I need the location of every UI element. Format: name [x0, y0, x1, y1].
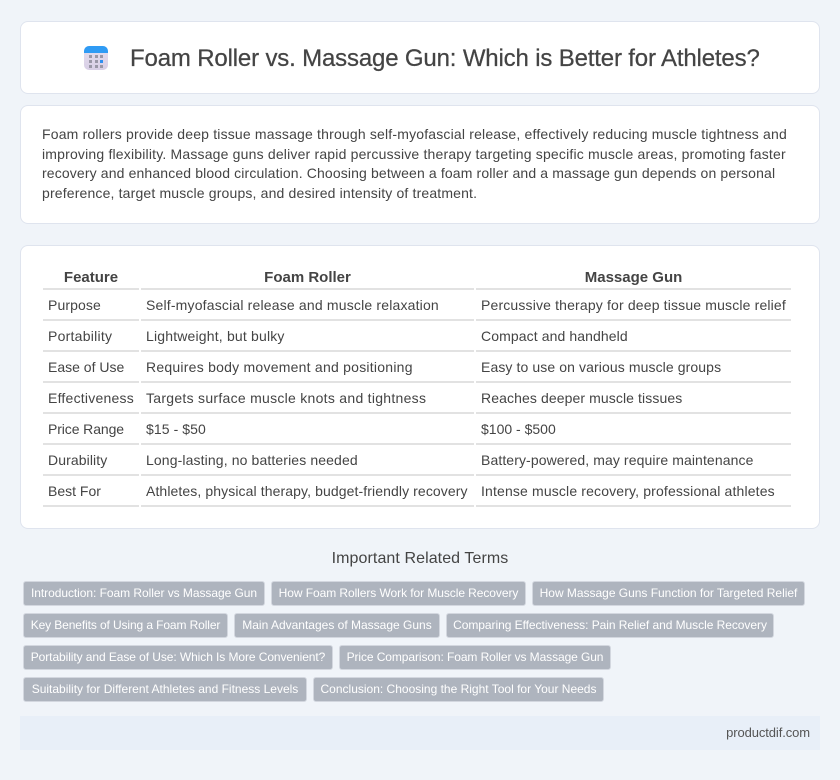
related term chips: Key Benefits of Using a Foam Roller: [31, 618, 220, 632]
related term chips: How Foam Rollers Work for Muscle Recovery: [279, 586, 518, 600]
table rows: Price Range: [48, 421, 124, 437]
table rows: Durability: [48, 452, 107, 468]
table rows: Easy to use on various muscle groups: [481, 359, 721, 375]
table rows: Portability: [48, 328, 112, 344]
table rows: Long-lasting, no batteries needed: [146, 452, 358, 468]
table rows: Lightweight, but bulky: [146, 328, 285, 344]
table header: Foam Roller: [264, 269, 351, 286]
table rows: Best For: [48, 483, 101, 499]
related term chips: Main Advantages of Massage Guns: [242, 618, 432, 632]
table rows: [43, 297, 791, 507]
footer source text: productdif.com: [726, 725, 810, 740]
comparison table: [43, 269, 791, 507]
header panel: [20, 21, 820, 94]
table rows: Battery-powered, may require maintenance: [481, 452, 753, 468]
table rows: Purpose: [48, 297, 101, 313]
footer bar: [20, 716, 820, 750]
table rows: $15 - $50: [146, 421, 206, 437]
related term chips: [23, 581, 805, 702]
related term chips: Conclusion: Choosing the Right Tool for Your Needs: [321, 682, 596, 696]
table header: Massage Gun: [585, 269, 682, 286]
related term chips: Introduction: Foam Roller vs Massage Gun: [31, 586, 257, 600]
table rows: Intense muscle recovery, professional athletes: [481, 483, 775, 499]
table rows: Compact and handheld: [481, 328, 628, 344]
intro paragraph: Foam rollers provide deep tissue massage through self-myofascial release, effectively reducing muscle tightness and: [42, 126, 787, 142]
table rows: $100 - $500: [481, 421, 556, 437]
table rows: Athletes, physical therapy, budget-friendly recovery: [146, 483, 468, 499]
table rows: Self-myofascial release and muscle relaxation: [146, 297, 439, 313]
table rows: Targets surface muscle knots and tightness: [146, 390, 426, 406]
related term chips: Portability and Ease of Use: Which Is More Convenient?: [31, 650, 325, 664]
icon: calendar: [84, 46, 108, 70]
related term chips: Suitability for Different Athletes and Fitness Levels: [32, 682, 298, 696]
panel: comparison table: [20, 245, 820, 529]
table rows: Requires body movement and positioning: [146, 359, 413, 375]
intro paragraph: improving flexibility. Massage guns deliver rapid percussive therapy targeting specific muscle areas, promoting faster: [42, 146, 786, 162]
title: Foam Roller vs. Massage Gun: Which is Better for Athletes?: [130, 45, 760, 72]
related term chips: How Massage Guns Function for Targeted Relief: [540, 586, 797, 600]
panel: introduction: [20, 105, 820, 224]
table header: Feature: [64, 269, 118, 286]
table header: [43, 269, 791, 290]
intro paragraph: preference, target muscle groups, and desired intensity of treatment.: [42, 185, 477, 201]
intro paragraph: recovery and enhanced blood circulation. Choosing between a foam roller and a massage gun depends on personal: [42, 165, 775, 181]
table rows: Effectiveness: [48, 390, 134, 406]
intro paragraph: [42, 126, 787, 201]
related term chips: Price Comparison: Foam Roller vs Massage Gun: [347, 650, 603, 664]
table rows: Reaches deeper muscle tissues: [481, 390, 682, 406]
table rows: Ease of Use: [48, 359, 124, 375]
related term chips: Comparing Effectiveness: Pain Relief and Muscle Recovery: [453, 618, 767, 632]
table rows: Percussive therapy for deep tissue muscle relief: [481, 297, 786, 313]
heading: related terms: Important Related Terms: [332, 550, 508, 567]
